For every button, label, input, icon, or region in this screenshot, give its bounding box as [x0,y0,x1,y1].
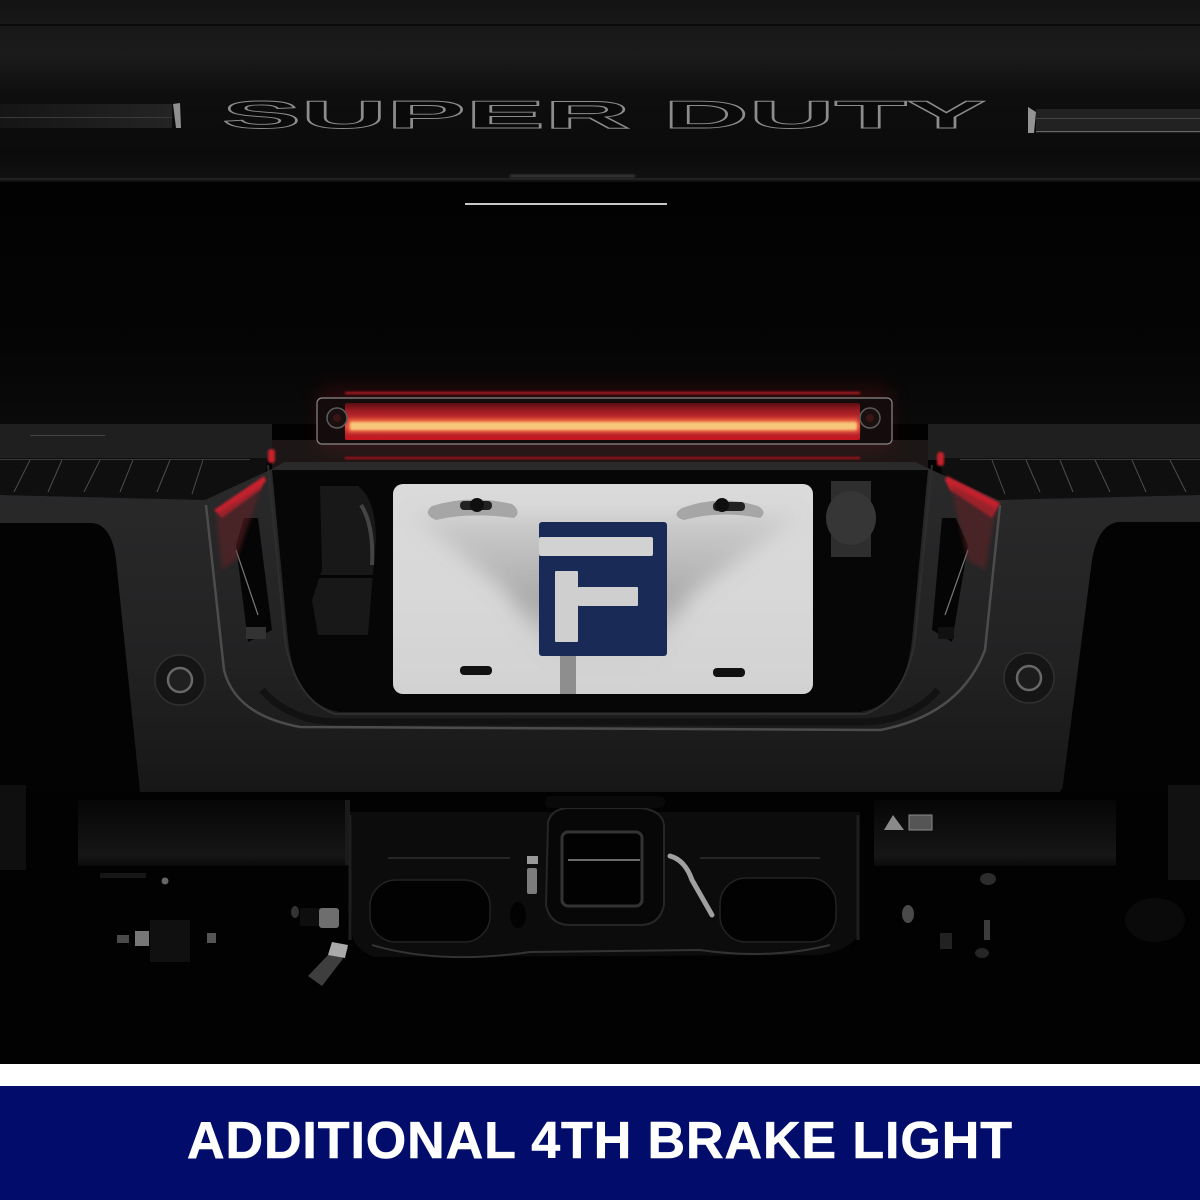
caption banner [0,1064,1200,1200]
right red reflected glow [937,452,1000,570]
hitch clip [527,856,538,894]
bumper top rail [0,424,1200,468]
4th brake light bar [317,388,892,448]
bumper main body [0,462,1200,792]
trailer hitch frame [350,812,860,957]
left bolt shadow [428,499,518,520]
lower left slot [460,666,492,675]
SUPER DUTY badge: SUPER DUTY [222,94,986,137]
logo mark [539,522,667,656]
left grommet [155,655,205,705]
center license plate pocket [206,465,1000,730]
hitch pin [670,856,712,915]
right underbody fittings [902,873,1185,958]
hitch receiver [545,796,665,925]
tailgate upper panel [0,0,1200,424]
right power outlet cap [826,481,876,557]
left bumper side slot [236,518,272,642]
right grommet [1004,653,1054,703]
right bumper side slot [932,518,968,642]
right chrome trim [1028,107,1200,133]
license plate [393,484,813,694]
chassis cross member [0,785,1200,880]
caption text: ADDITIONAL 4TH BRAKE LIGHT [187,1112,1012,1170]
upper right slot and bolt [713,498,745,512]
left underbody fittings [100,873,216,962]
left red reflected glow [214,449,275,570]
plate shadow below logo [560,656,576,694]
right bolt shadow [676,500,764,520]
bumper left step pad [0,458,268,500]
left wiring connector [312,486,376,635]
warning labels [884,815,932,830]
upper left slot and bolt [460,498,492,512]
left black window [0,523,140,792]
left chrome trim [0,103,181,128]
wiring plug and tag [291,906,348,986]
bumper right step pad [940,458,1200,500]
lower right slot [713,668,745,677]
right black window [1062,522,1200,792]
plate light shadow [410,515,800,660]
